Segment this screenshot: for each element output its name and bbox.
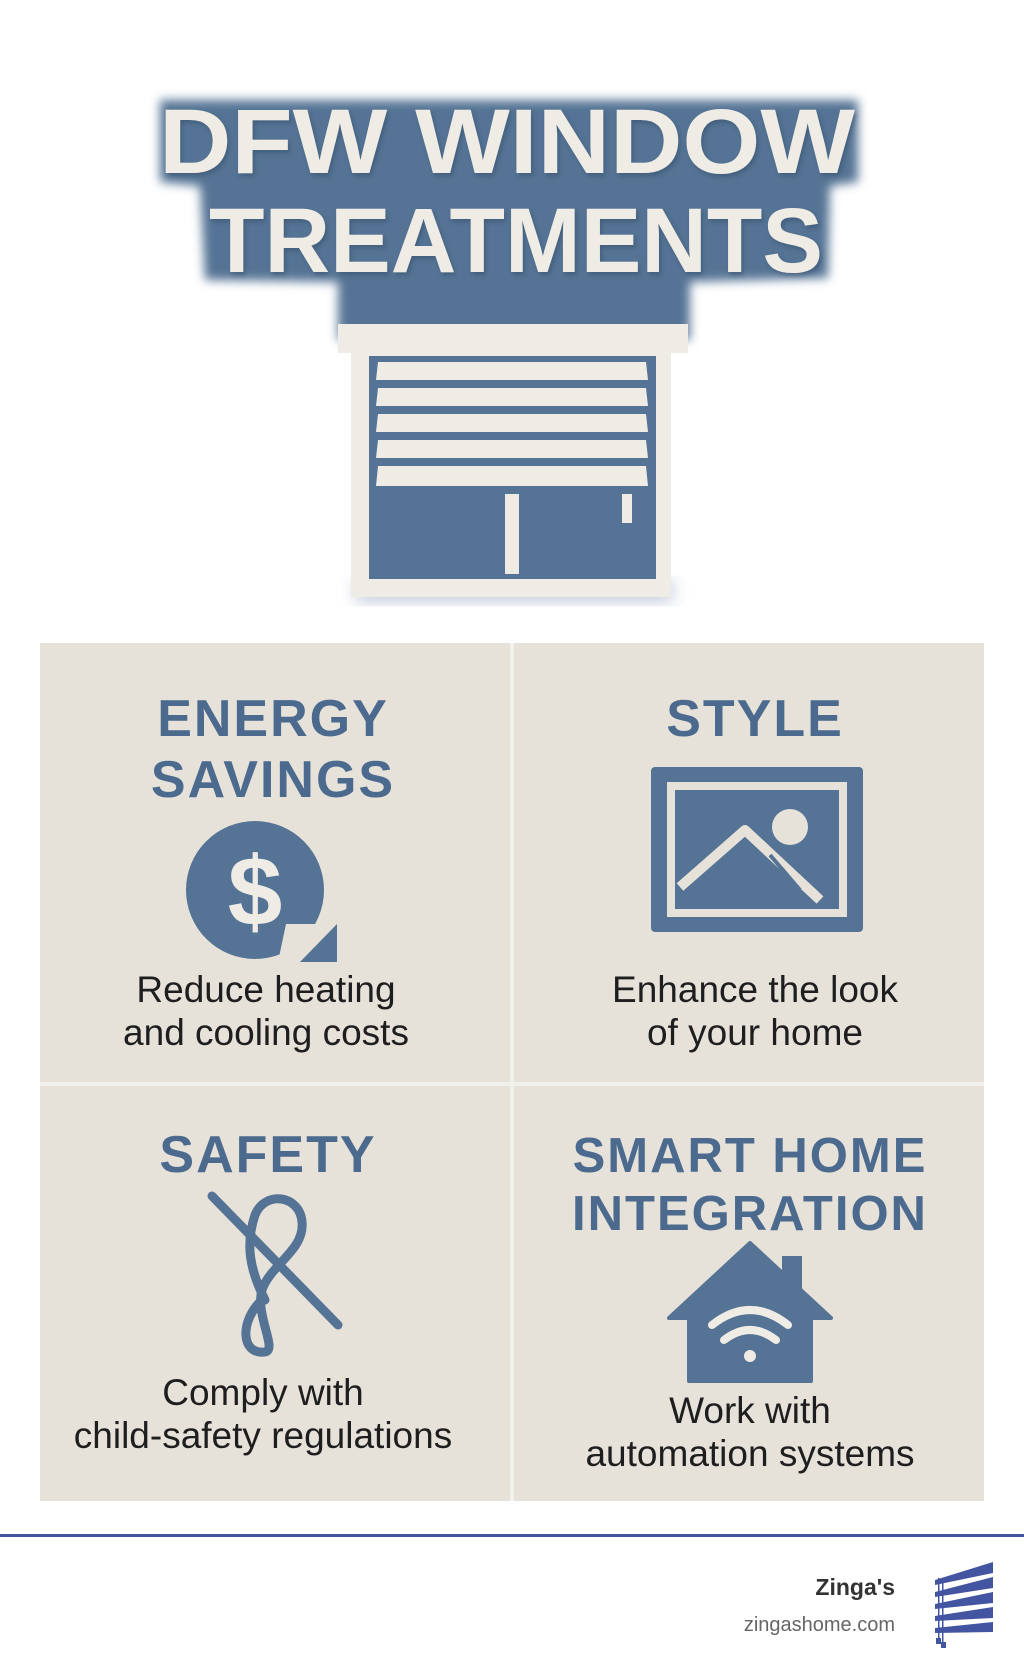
panel: style: of your home	[647, 1012, 863, 1053]
title	[159, 91, 858, 340]
panel: smart home integration: INTEGRATION	[572, 1187, 928, 1241]
panel: safety: child-safety regulations	[74, 1415, 452, 1456]
panel: energy savings: and cooling costs	[123, 1012, 409, 1053]
panel grid background	[40, 643, 984, 1501]
panel: safety: SAFETY	[159, 1126, 377, 1184]
icon: smart house	[669, 1243, 831, 1381]
footer brand text	[744, 1574, 895, 1636]
panel: style: STYLE	[666, 690, 844, 748]
title: TREATMENTS	[209, 190, 823, 292]
panel: style: Enhance the look	[612, 969, 898, 1010]
panel: energy savings: SAVINGS	[151, 751, 395, 809]
panel: smart home integration	[572, 1129, 928, 1474]
icon: window blind	[338, 324, 688, 602]
panel: safety: Comply with	[162, 1372, 364, 1413]
icon: dollar circle: $	[228, 836, 282, 946]
footer divider	[0, 1534, 1024, 1537]
footer brand text: Zinga's	[815, 1574, 895, 1600]
icon: picture	[651, 767, 863, 932]
icon: dollar circle	[186, 821, 337, 962]
footer brand text: zingashome.com	[744, 1614, 895, 1636]
panel: smart home integration: SMART HOME	[573, 1129, 927, 1183]
panel: energy savings	[123, 690, 409, 1053]
panel: energy savings: ENERGY	[157, 690, 389, 748]
title: DFW WINDOW	[159, 91, 855, 193]
panel: smart home integration: Work with	[669, 1390, 831, 1431]
panel: energy savings: Reduce heating	[136, 969, 396, 1010]
panel: smart home integration: automation systems	[585, 1433, 915, 1474]
icon: cord with slash	[212, 1196, 338, 1352]
panel: safety	[74, 1126, 452, 1456]
icon: logo blinds	[935, 1562, 993, 1648]
panel: style	[612, 690, 898, 1053]
